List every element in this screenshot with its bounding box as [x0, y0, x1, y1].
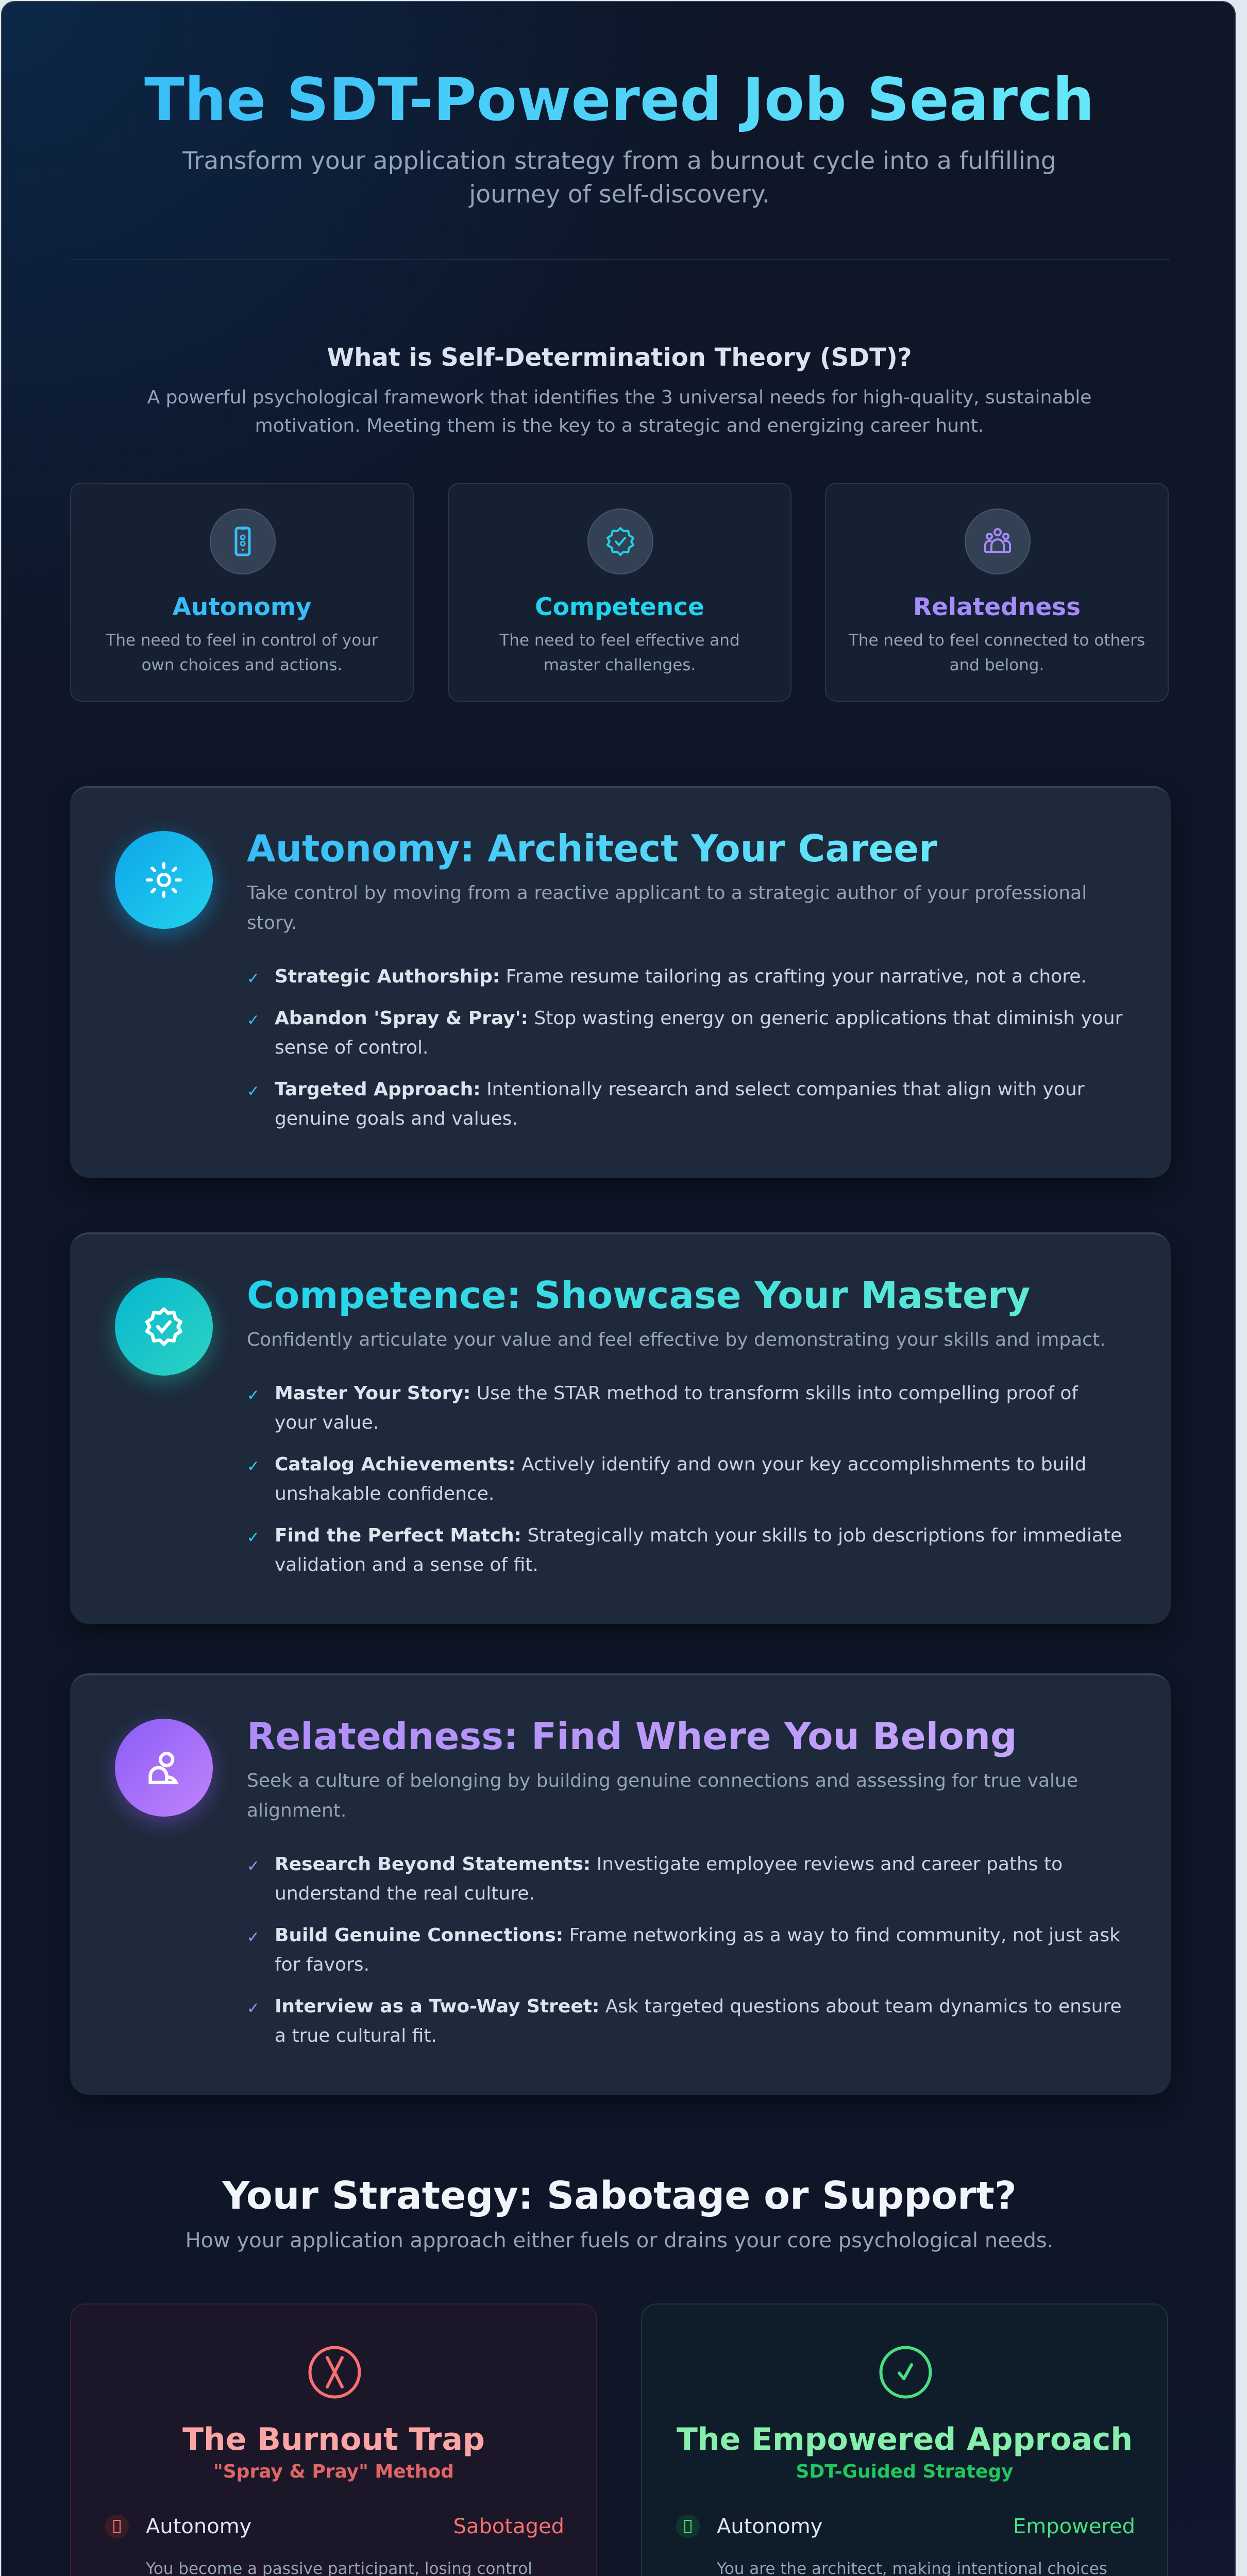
- text: The need to feel effective and master challenges.: [499, 631, 740, 674]
- subtitle: SDT-Guided Strategy: [796, 2461, 1014, 2482]
- label: Autonomy: [173, 593, 311, 621]
- icon: x circle: [308, 2346, 361, 2399]
- checklist: Master Your Story: Use the STAR method to transform skills into compelling proof of your value.: [275, 1383, 1078, 1433]
- checklist: Build Genuine Connections: Frame networking as a way to find community, not just ask for favors.: [275, 1925, 1120, 1975]
- panel: autonomy: [70, 786, 1171, 1178]
- icon: check circle: [879, 2346, 932, 2399]
- panel: burnout trap: [70, 2303, 597, 2576]
- icon: badge check: [587, 509, 653, 574]
- checklist: Targeted Approach: Intentionally research and select companies that align with your genuine goals and values.: [275, 1079, 1085, 1129]
- subtitle: "Spray & Pray" Method: [213, 2461, 454, 2482]
- checklist: ✓: [247, 1529, 260, 1547]
- checklist: Research Beyond Statements: Investigate employee reviews and career paths to understand the real culture.: [275, 1854, 1063, 1904]
- text: The need to feel in control of your own choices and actions.: [106, 631, 378, 674]
- checklist: ✓: [247, 1857, 260, 1875]
- checklist: ✓: [247, 1011, 260, 1029]
- icon: badge: [115, 1278, 213, 1376]
- panel: relatedness: [70, 1673, 1171, 2095]
- card: competence need: [448, 483, 791, 702]
- checklist: ✓: [247, 1928, 260, 1946]
- row: autonomy: Autonomy: [717, 2515, 822, 2538]
- description: Confidently articulate your value and feel effective by demonstrating your skills and impact.: [247, 1329, 1106, 1350]
- checklist: ✓: [247, 1458, 260, 1476]
- text: The need to feel connected to others and belong.: [849, 631, 1145, 674]
- description: Seek a culture of belonging by building genuine connections and assessing for true value alignment.: [247, 1770, 1078, 1821]
- heading: strategy: Your Strategy: Sabotage or Support?: [222, 2174, 1017, 2218]
- strategy subtitle: How your application approach either fuels or drains your core psychological needs.: [186, 2229, 1053, 2252]
- panel: competence: [70, 1232, 1171, 1624]
- heading: Autonomy: Architect Your Career: [247, 827, 937, 870]
- checklist: ✓: [247, 1999, 260, 2018]
- label: Competence: [535, 593, 704, 621]
- title: The SDT-Powered Job Search: [144, 65, 1094, 134]
- icon: sun: [115, 831, 213, 929]
- label: Relatedness: [913, 593, 1081, 621]
- title: The Empowered Approach: [677, 2421, 1133, 2458]
- subtitle: Transform your application strategy from a burnout cycle into a fulfilling journey of self-discovery.: [182, 147, 1056, 209]
- checklist: Catalog Achievements: Actively identify and own your key accomplishments to build unshakable confidence.: [275, 1454, 1086, 1504]
- checklist: ✓: [247, 970, 260, 988]
- heading: Relatedness: Find Where You Belong: [247, 1715, 1017, 1758]
- checklist: [247, 966, 1122, 1129]
- panel: empowered approach: [641, 2303, 1168, 2576]
- card: autonomy need: [70, 483, 414, 702]
- intro text: A powerful psychological framework that identifies the 3 universal needs for high-quality, sustainable motivation. Meeting them is the key to a strategic and energizing career hunt.: [147, 387, 1091, 436]
- checklist: Abandon 'Spray & Pray': Stop wasting energy on generic applications that diminish your sense of control.: [275, 1008, 1122, 1058]
- heading: Competence: Showcase Your Mastery: [247, 1274, 1030, 1317]
- checklist: [247, 1383, 1122, 1575]
- checklist: Interview as a Two-Way Street: Ask targeted questions about team dynamics to ensure a true cultural fit.: [275, 1996, 1122, 2046]
- description: Take control by moving from a reactive applicant to a strategic author of your professional story.: [247, 883, 1087, 934]
- icon: users: [965, 509, 1031, 574]
- heading: what is SDT: What is Self-Determination Theory (SDT)?: [327, 343, 912, 372]
- icon: person: [115, 1719, 213, 1817]
- icon: phone/clipboard: [210, 509, 276, 574]
- checklist: [247, 1854, 1122, 2046]
- checklist: ✓: [247, 1082, 260, 1100]
- row: autonomy: Empowered: [1013, 2515, 1135, 2538]
- checklist: ✓: [247, 1386, 260, 1404]
- row: autonomy: [105, 2515, 564, 2576]
- row: autonomy: Sabotaged: [453, 2515, 564, 2538]
- row: autonomy: [676, 2515, 1135, 2576]
- card: relatedness need: [825, 483, 1169, 702]
- checklist: Strategic Authorship: Frame resume tailoring as crafting your narrative, not a chore.: [275, 966, 1087, 987]
- title: The Burnout Trap: [182, 2421, 485, 2458]
- row: autonomy: Autonomy: [146, 2515, 251, 2538]
- checklist: Find the Perfect Match: Strategically match your skills to job descriptions for immediate validation and a sense of fit.: [275, 1525, 1122, 1575]
